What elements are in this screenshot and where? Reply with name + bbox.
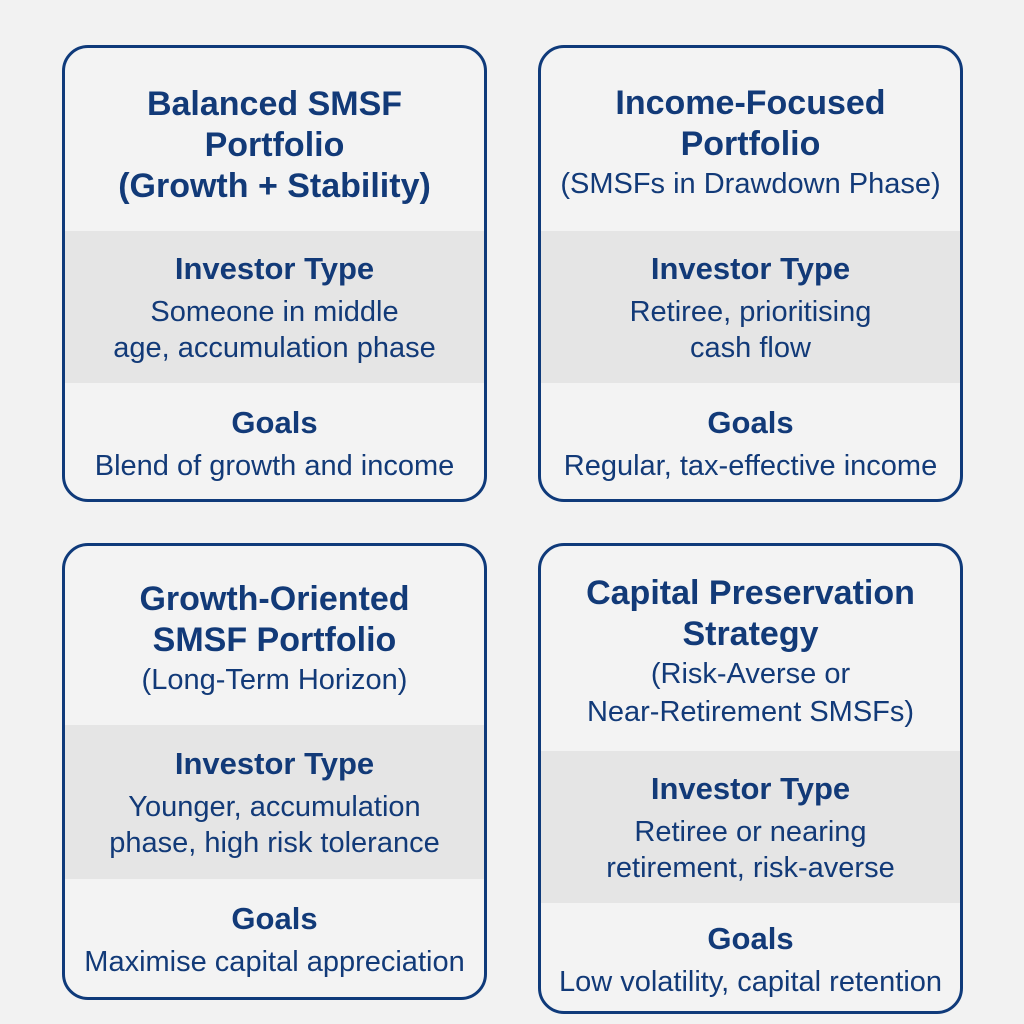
goals: capital preservation: Goals	[707, 921, 794, 956]
title: income: (SMSFs in Drawdown Phase)	[560, 168, 941, 200]
investor type: balanced	[65, 231, 484, 383]
investor type: capital preservation	[541, 751, 960, 903]
title: balanced: Balanced SMSF	[147, 85, 402, 123]
investor type: income: cash flow	[690, 332, 811, 364]
title: balanced	[118, 85, 431, 205]
title: growth	[139, 580, 410, 696]
investor type: balanced: Someone in middle	[150, 296, 399, 328]
goals: growth: Maximise capital appreciation	[84, 946, 465, 978]
goals: capital preservation	[559, 921, 942, 998]
title: balanced: (Growth + Stability)	[118, 167, 431, 205]
card: growth	[62, 543, 487, 1000]
title: capital preservation	[586, 574, 915, 728]
investor type: balanced: Investor Type	[175, 251, 374, 286]
investor type: growth: phase, high risk tolerance	[109, 827, 440, 859]
goals: balanced	[95, 405, 454, 482]
title: growth: SMSF Portfolio	[153, 620, 396, 658]
investor type: capital preservation: Retiree or nearing	[634, 816, 867, 848]
investor type: income: Investor Type	[651, 251, 850, 286]
card: income	[538, 45, 963, 502]
card: balanced	[62, 45, 487, 502]
investor type: growth: Younger, accumulation	[128, 791, 421, 823]
goals: balanced: Goals	[231, 405, 318, 440]
title: growth: (Long-Term Horizon)	[142, 664, 407, 696]
investor type: growth: Investor Type	[175, 746, 374, 781]
goals: income: Regular, tax-effective income	[564, 450, 937, 482]
title: balanced: Portfolio	[205, 126, 344, 164]
goals: income	[564, 405, 937, 482]
title: capital preservation: (Risk-Averse or	[651, 658, 850, 690]
title: growth: Growth-Oriented	[139, 580, 410, 618]
investor type: capital preservation: retirement, risk-averse	[606, 852, 895, 884]
title: income: Portfolio	[681, 124, 820, 162]
goals: growth	[84, 901, 465, 978]
title: capital preservation: Near-Retirement SMSFs)	[587, 696, 914, 728]
card: capital preservation	[538, 543, 963, 1014]
investor type: growth	[65, 725, 484, 879]
title: capital preservation: Strategy	[682, 614, 819, 652]
investor type: income: Retiree, prioritising	[630, 296, 871, 328]
investor type: balanced: age, accumulation phase	[113, 332, 436, 364]
goals: growth: Goals	[231, 901, 318, 936]
investor type: income	[541, 231, 960, 383]
title: capital preservation: Capital Preservation	[586, 574, 915, 612]
goals: income: Goals	[707, 405, 794, 440]
title: income: Income-Focused	[615, 84, 886, 122]
title: income	[560, 84, 941, 200]
goals: balanced: Blend of growth and income	[95, 450, 454, 482]
goals: capital preservation: Low volatility, capital retention	[559, 966, 942, 998]
investor type: capital preservation: Investor Type	[651, 771, 850, 806]
